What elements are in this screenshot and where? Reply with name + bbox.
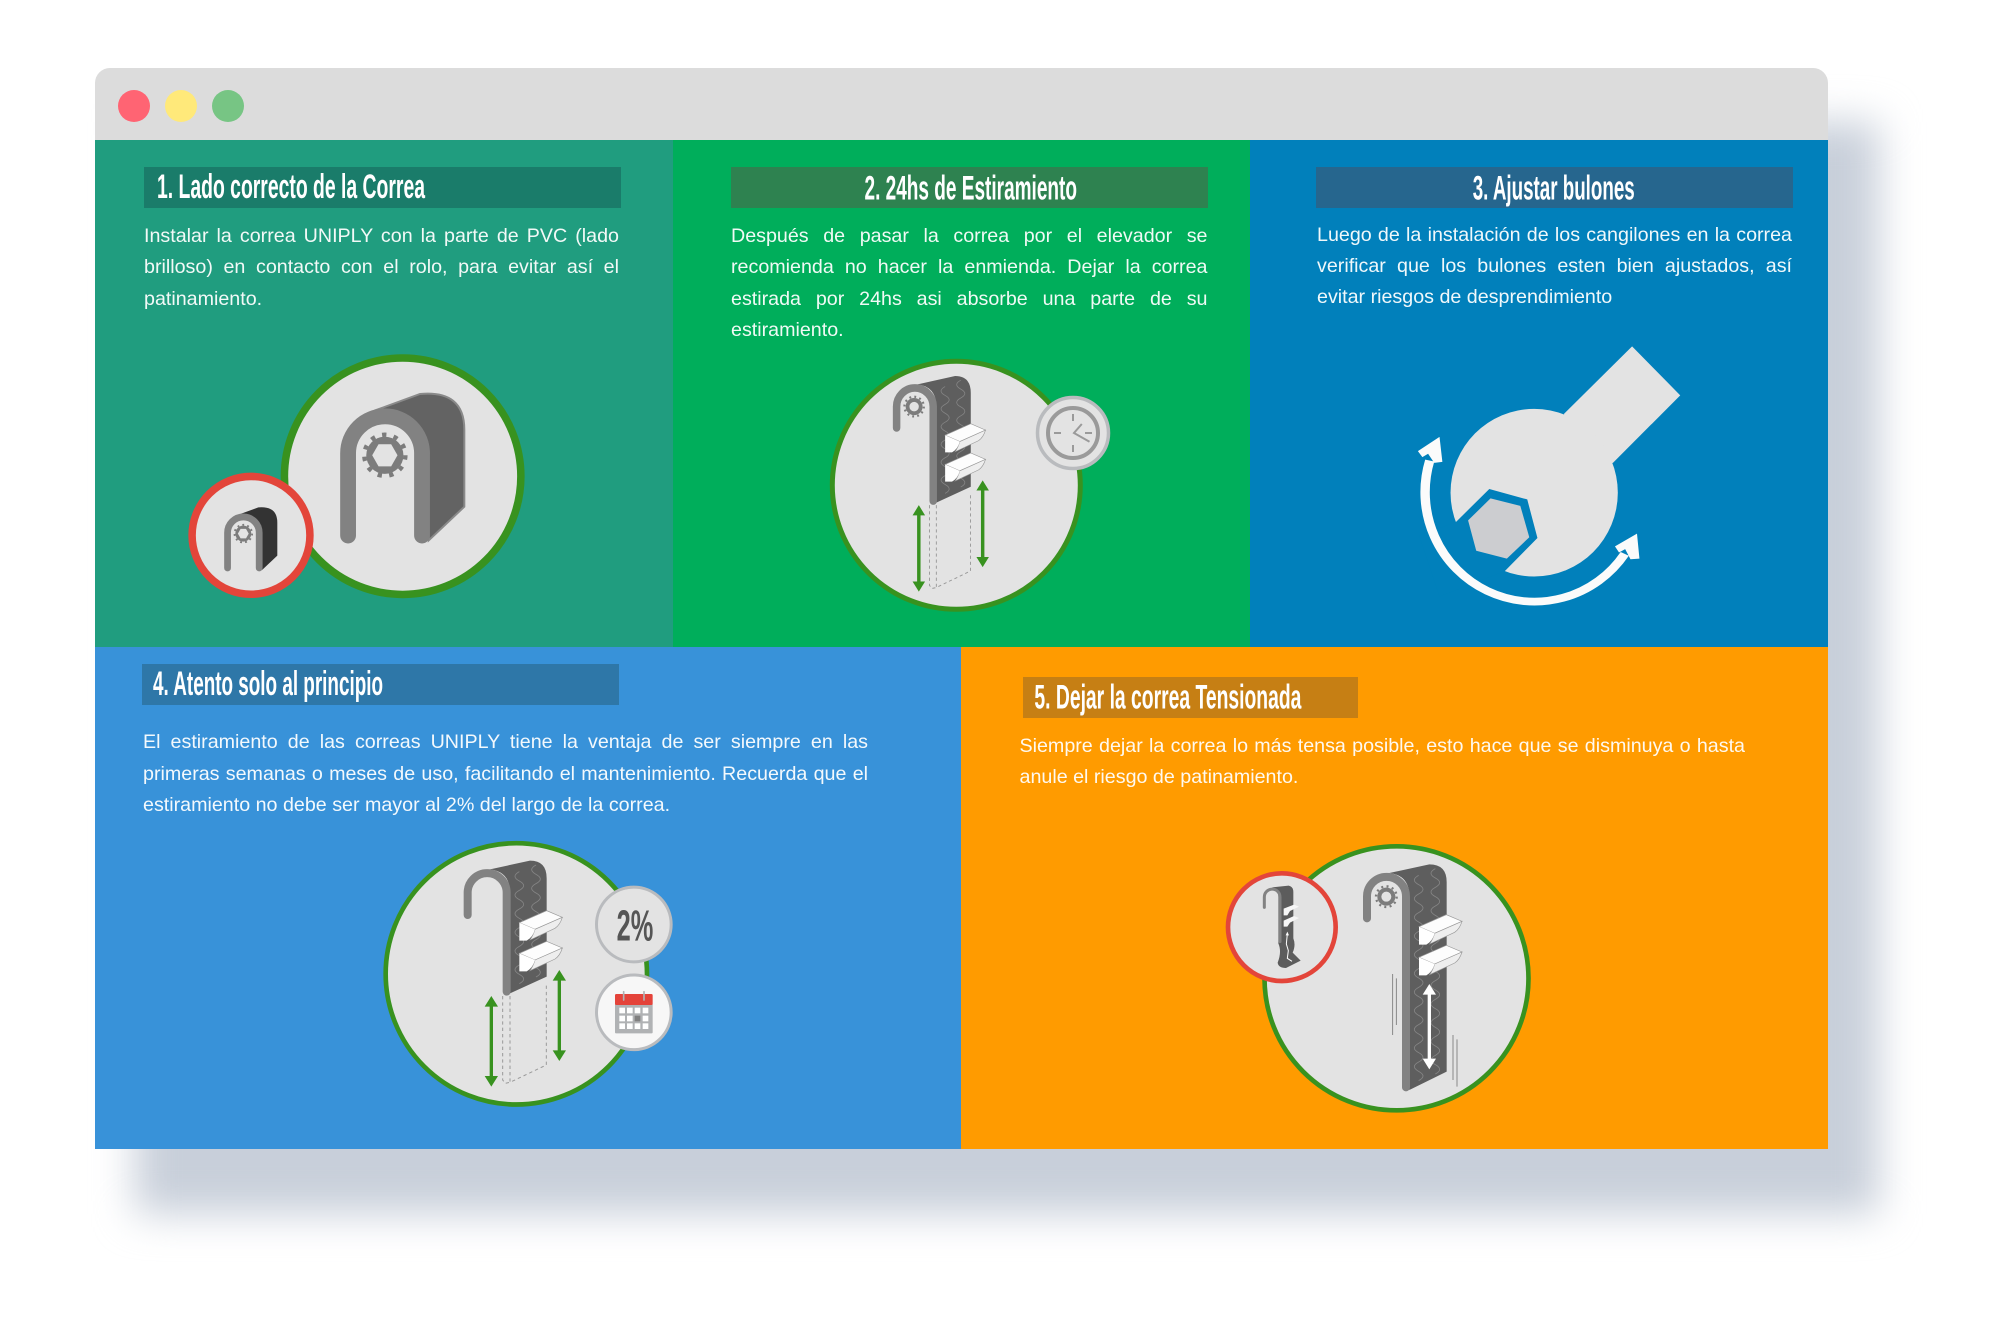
panel: 5 dejar la correa tensionada	[961, 646, 1828, 1149]
illustration: tensioned belt and slack belt	[1226, 844, 1531, 1113]
heading 2	[731, 167, 1208, 208]
window drop shadow	[135, 122, 1879, 1214]
icon: wrench turning a hex bolt	[1418, 346, 1680, 606]
panel: 2 24hs de estiramiento	[672, 140, 1250, 646]
text block 5: anule el riesgo de patinamiento.	[1020, 766, 1298, 788]
illustration: belt stretch with 2% and calendar badges: 2%	[617, 901, 653, 950]
heading 1: 1. Lado correcto de la Correa	[157, 168, 426, 206]
text block 3: verificar que los bulones esten bien ajustados, así	[1317, 255, 1792, 277]
text block 2: estirada por 24hs asi absorbe una parte de su	[731, 288, 1208, 310]
title bar	[95, 68, 1828, 140]
text block 1: Instalar la correa UNIPLY con la parte de PVC (lado	[144, 225, 619, 247]
yellow window dot	[165, 90, 197, 122]
text block 3: evitar riesgos de desprendimiento	[1317, 286, 1612, 308]
panel: 4 atento solo al principio	[95, 646, 961, 1149]
green window dot	[212, 90, 244, 122]
illustration: belt stretch with 2% and calendar badges	[383, 840, 673, 1107]
text block 4: primeras semanas o meses de uso, facilitando el mantenimiento. Recuerda que el	[143, 762, 868, 784]
panel: 3 ajustar bulones	[1250, 140, 1828, 646]
red window dot	[118, 90, 150, 122]
heading 3: 3. Ajustar bulones	[1473, 169, 1635, 207]
text block 4	[143, 731, 868, 816]
text block 4: El estiramiento de las correas UNIPLY tiene la ventaja de ser siempre en las	[143, 731, 868, 753]
text block 2	[731, 225, 1208, 341]
heading 4: 4. Atento solo al principio	[153, 665, 383, 703]
illustration: belt on roller, correct and incorrect side	[188, 354, 525, 598]
text block 5: Siempre dejar la correa lo más tensa posible, esto hace que se disminuya o hasta	[1020, 735, 1745, 757]
text block 2: Después de pasar la correa por el elevador se	[731, 225, 1208, 247]
panel: 1 lado correcto	[95, 140, 672, 646]
text block 3	[1317, 224, 1792, 308]
text block 3: Luego de la instalación de los cangilones en la correa	[1317, 224, 1792, 246]
text block 4: estiramiento no debe ser mayor al 2% del largo de la correa.	[143, 794, 670, 816]
illustration: stretched belt with buckets and clock	[830, 358, 1110, 612]
text block 2: estiramiento.	[731, 319, 844, 341]
text block 1: patinamiento.	[144, 288, 262, 310]
text block 1: brilloso) en contacto con el rolo, para evitar así el	[144, 256, 619, 278]
text block 1	[144, 225, 619, 310]
heading 3	[1316, 167, 1793, 208]
text block 5	[1020, 735, 1745, 788]
browser window	[95, 68, 1828, 140]
text block 2: recomienda no hacer la enmienda. Dejar la correa	[731, 256, 1208, 278]
